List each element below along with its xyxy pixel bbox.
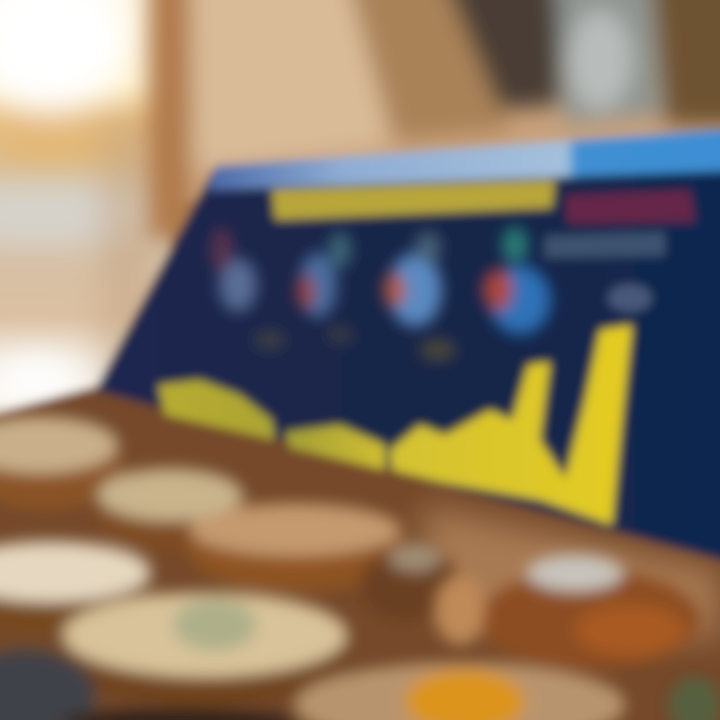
bowl: small centre: [360, 544, 460, 621]
bowl: centre right: [188, 504, 412, 592]
green accent lower right: [669, 677, 720, 720]
bowl: left: [0, 542, 155, 633]
warm tabletop band under the board: [420, 505, 720, 640]
bowl: right: [480, 555, 700, 670]
small charts row: [212, 227, 550, 360]
small chart 4: [484, 227, 550, 334]
bowl: middle: [95, 469, 255, 553]
small chart 1: [212, 228, 256, 311]
table surface: [0, 385, 720, 720]
board panel: [95, 128, 720, 568]
small chart 2: [298, 232, 350, 317]
dark foreground corner: [0, 650, 95, 720]
bowl: front right with orange food: [295, 663, 625, 720]
board header stripe: [208, 128, 720, 190]
wall and pillar behind the board: [148, 0, 720, 240]
chart board: [95, 128, 720, 568]
dark bowl shadow: [60, 708, 300, 720]
warm glow between centre bowls: [436, 576, 484, 644]
red heading: [565, 190, 695, 224]
small chart 3: [385, 232, 441, 326]
yellow area chart: [158, 325, 632, 525]
sun glare: [0, 0, 150, 402]
yellow heading: [272, 180, 555, 220]
bowl: front: [57, 593, 353, 705]
table with bowls: [0, 385, 720, 720]
bowl: upper left: [0, 417, 125, 510]
grey subheading: [545, 232, 665, 258]
